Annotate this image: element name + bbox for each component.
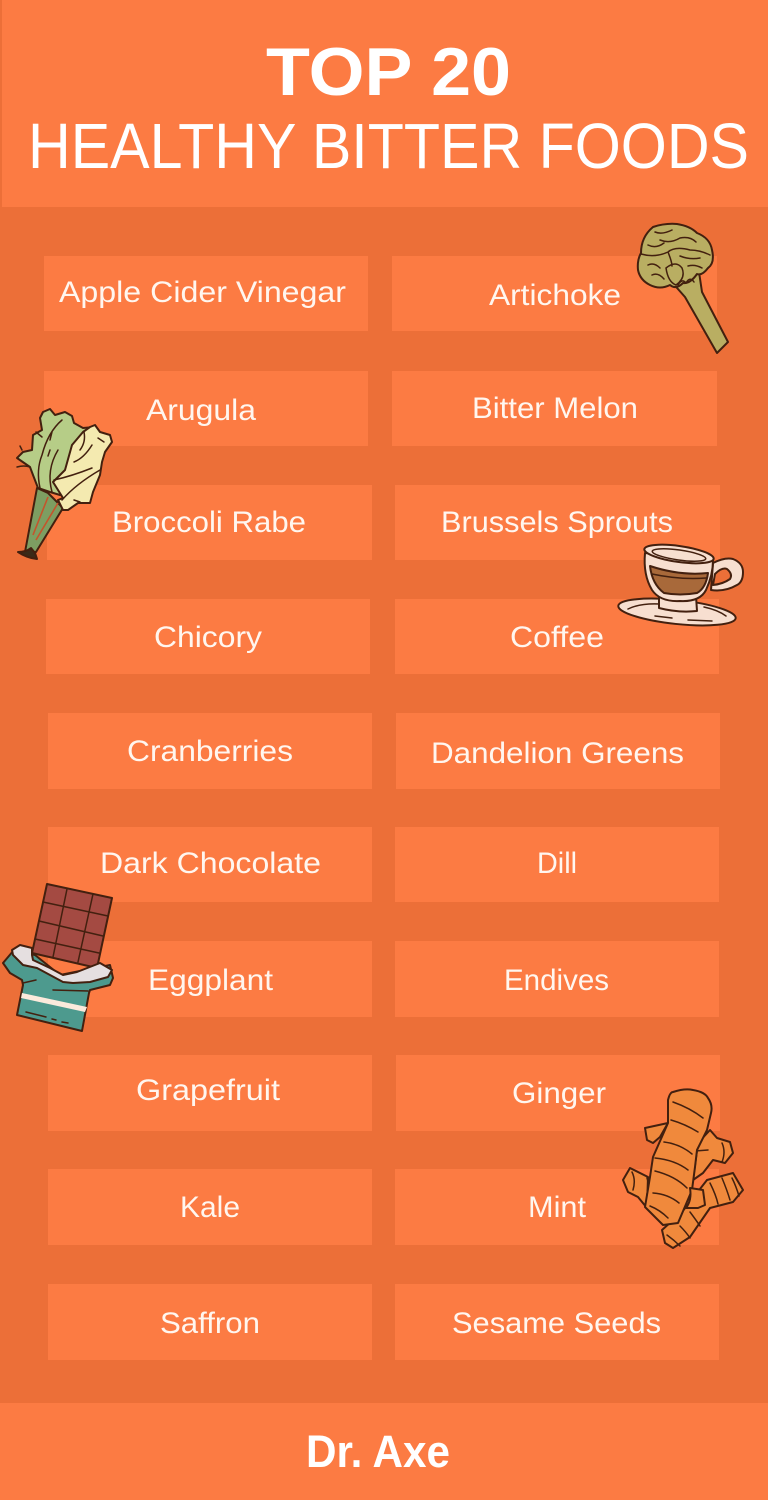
item: Broccoli Rabe [47,485,372,560]
item: Bitter Melon [392,371,717,446]
item: Artichoke: Artichoke [489,279,621,312]
item: Apple Cider Vinegar: Apple Cider Vinegar [59,276,346,309]
item: Eggplant [48,941,372,1017]
item: Sesame Seeds [395,1284,719,1360]
item: Mint [395,1169,719,1245]
item: Dandelion Greens [396,713,720,789]
item: Dandelion Greens: Dandelion Greens [431,737,684,770]
icon: broccoli rabe leaves [17,409,112,559]
footer banner [0,1403,768,1500]
item: Kale: Kale [180,1191,240,1224]
item: Endives: Endives [504,964,609,997]
icon: artichoke [638,224,728,353]
item: Brussels Sprouts: Brussels Sprouts [441,506,673,539]
item: Apple Cider Vinegar [44,256,368,331]
item: Cranberries [48,713,372,789]
item: Chicory [46,599,370,674]
icon: ginger root [623,1089,743,1248]
item: Dill [395,827,719,902]
item: Dark Chocolate: Dark Chocolate [100,847,321,880]
item: Saffron [48,1284,372,1360]
item: Broccoli Rabe: Broccoli Rabe [112,506,306,539]
item: Ginger: Ginger [512,1077,606,1110]
item: Grapefruit [48,1055,372,1131]
item: Kale [48,1169,372,1245]
food list [44,256,720,1360]
logo: Dr. Axe: Dr. Axe [306,1426,450,1477]
title line: TOP 20: TOP 20 [266,34,511,110]
item: Saffron: Saffron [160,1307,260,1340]
item: Coffee [395,599,719,674]
icon: coffee cup [617,541,743,630]
item: Cranberries: Cranberries [127,735,293,768]
item: Eggplant: Eggplant [148,964,274,997]
item: Bitter Melon: Bitter Melon [472,392,638,425]
title banner [2,0,768,207]
item: Brussels Sprouts [395,485,720,560]
item: Grapefruit: Grapefruit [136,1074,281,1107]
item: Dill: Dill [537,847,577,880]
item: Sesame Seeds: Sesame Seeds [452,1307,661,1340]
item: Coffee: Coffee [510,621,604,654]
item: Dark Chocolate [48,827,372,902]
item: Artichoke [392,256,717,331]
item: Arugula: Arugula [146,394,256,427]
item: Ginger [396,1055,720,1131]
item: Mint: Mint [528,1191,587,1224]
item: Chicory: Chicory [154,621,262,654]
item: Endives [395,941,719,1017]
item: Arugula [44,371,368,446]
icon: chocolate bar [3,884,113,1031]
